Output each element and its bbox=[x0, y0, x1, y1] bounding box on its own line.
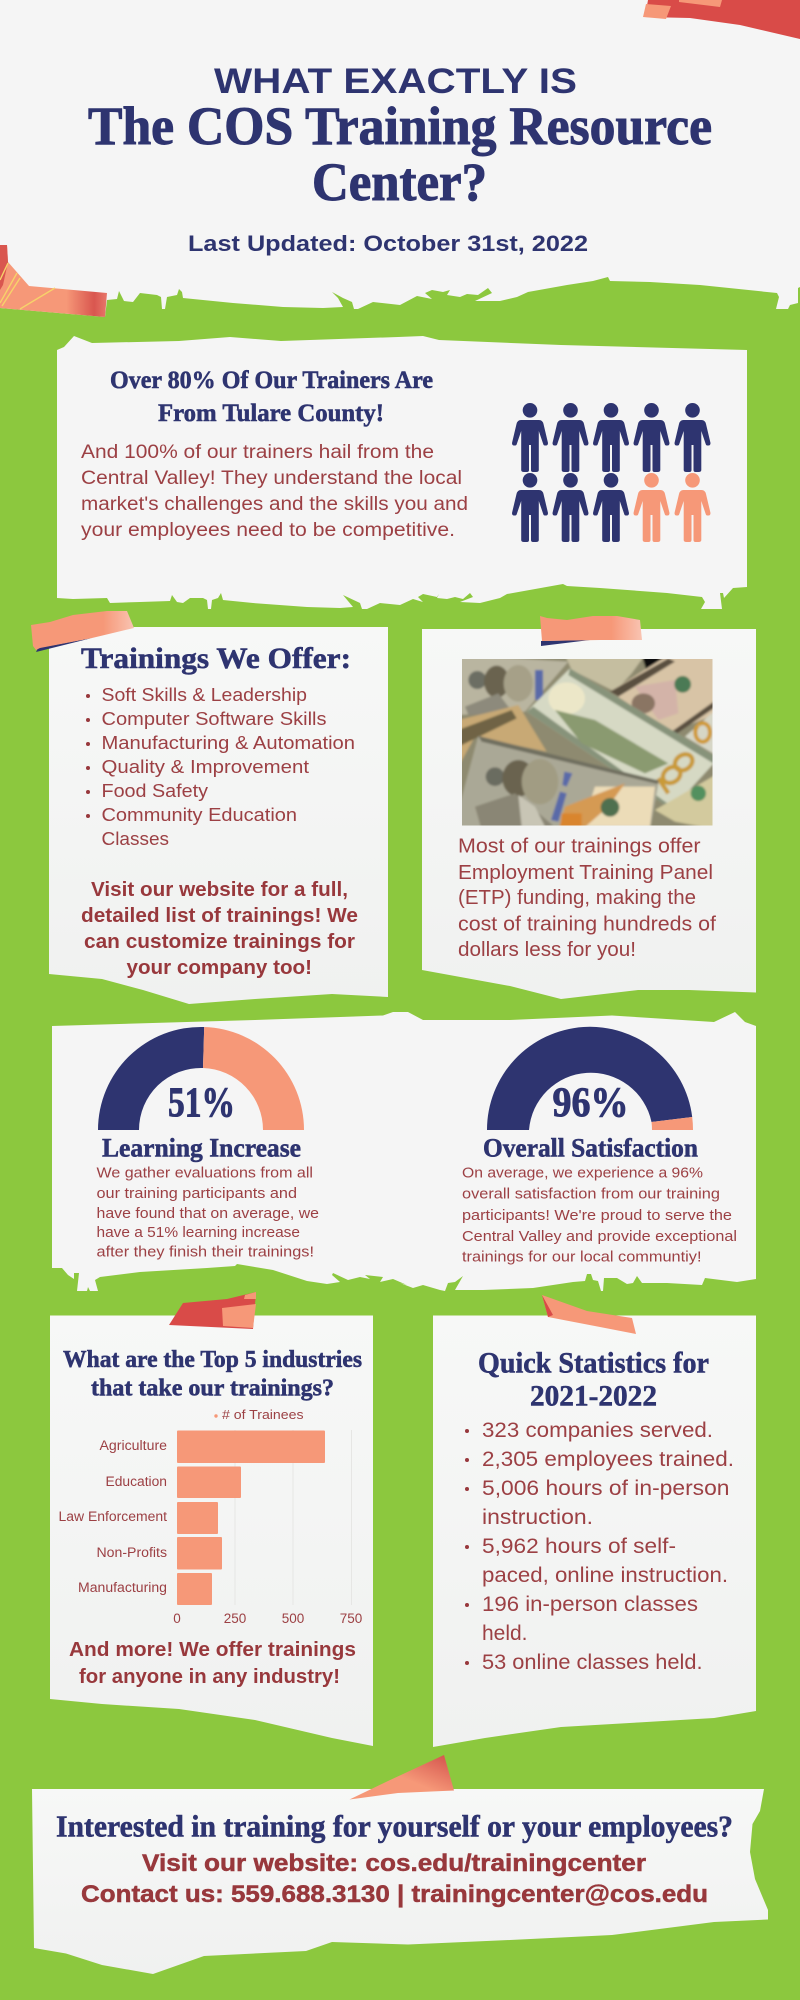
heading: trainings: Trainings We Offer: bbox=[81, 642, 351, 675]
bars bbox=[177, 1430, 325, 1605]
category labels: Manufacturing bbox=[78, 1580, 167, 1595]
heading: overall satisfaction: Overall Satisfaction bbox=[483, 1134, 699, 1162]
panel: header bbox=[0, 0, 800, 317]
callout: visit website: detailed list of trainings! We bbox=[81, 905, 358, 927]
heading: industries: What are the Top 5 industries bbox=[63, 1347, 362, 1373]
heading: learning increase: Learning Increase bbox=[102, 1134, 301, 1162]
text: learning body: We gather evaluations from all bbox=[96, 1165, 313, 1182]
heading: statistics: Quick Statistics for bbox=[478, 1346, 709, 1379]
list: statistics: 5,962 hours of self- bbox=[482, 1534, 676, 1558]
heading: trainers: Over 80% Of Our Trainers Are bbox=[110, 367, 433, 394]
list: statistics: 196 in-person classes bbox=[482, 1592, 698, 1616]
text: learning body: after they finish their trainings! bbox=[96, 1244, 314, 1261]
text: satisfaction body: participants! We're proud to serve the bbox=[462, 1207, 732, 1224]
category labels: Education bbox=[106, 1474, 167, 1489]
list: trainings bbox=[86, 684, 355, 849]
text: funding body: (ETP) funding, making the bbox=[458, 887, 696, 909]
tape: top right bbox=[643, 0, 800, 39]
panel: ETP funding bbox=[422, 616, 756, 999]
panel: top 5 industries bbox=[50, 1292, 373, 1746]
stat: 51%: 51% bbox=[168, 1080, 235, 1126]
text: trainers body bbox=[81, 442, 468, 541]
date line: Last Updated: October 31st, 2022 bbox=[188, 231, 588, 256]
bar chart: trainees by industry bbox=[58, 1407, 362, 1626]
panel: evaluation gauges bbox=[52, 1012, 756, 1291]
list: statistics: 5,006 hours of in-person bbox=[482, 1476, 730, 1500]
text: satisfaction body: overall satisfaction from our training bbox=[462, 1186, 720, 1203]
heading: industries bbox=[63, 1347, 362, 1402]
title: Center? bbox=[312, 152, 487, 212]
text: trainers body: your employees need to be competitive. bbox=[81, 520, 455, 541]
text: website: Visit our website: cos.edu/trainingcenter bbox=[142, 1850, 646, 1877]
text: funding body: cost of training hundreds of bbox=[458, 914, 716, 936]
chart: 96% gauge bbox=[487, 1027, 693, 1130]
heading: statistics bbox=[478, 1346, 709, 1412]
list: trainings: Quality & Improvement bbox=[102, 756, 309, 777]
text: learning body: our training participants and bbox=[96, 1185, 297, 1202]
tape: trainings bbox=[31, 611, 134, 652]
tape: funding bbox=[540, 616, 642, 646]
text: funding body: Most of our trainings offer bbox=[458, 836, 701, 858]
callout: more industries: for anyone in any industry! bbox=[79, 1666, 340, 1688]
axis ticks: 500 bbox=[282, 1611, 304, 1626]
callout: more industries: And more! We offer trainings bbox=[69, 1639, 356, 1661]
heading: trainers bbox=[110, 367, 433, 427]
text: funding body: dollars less for you! bbox=[458, 939, 636, 961]
callout: visit website: your company too! bbox=[126, 957, 312, 979]
heading: industries: that take our trainings? bbox=[91, 1376, 334, 1402]
list: statistics: held. bbox=[482, 1621, 528, 1645]
title: The COS Training Resource bbox=[88, 96, 712, 156]
axis ticks bbox=[173, 1611, 362, 1626]
category labels bbox=[58, 1438, 167, 1595]
heading: contact: Interested in training for yourself or your employees? bbox=[56, 1809, 733, 1844]
panel: trainings offered bbox=[31, 611, 388, 1004]
axis ticks: 250 bbox=[224, 1611, 246, 1626]
text: trainers body: And 100% of our trainers hail from the bbox=[81, 442, 434, 463]
axis ticks: 0 bbox=[173, 1611, 181, 1626]
heading: trainers: From Tulare County! bbox=[158, 400, 384, 427]
stat: 96%: 96% bbox=[552, 1080, 628, 1126]
list: statistics bbox=[465, 1418, 734, 1674]
title: WHAT EXACTLY IS bbox=[214, 62, 577, 101]
list: trainings: Soft Skills & Leadership bbox=[102, 684, 307, 705]
list: statistics: 53 online classes held. bbox=[482, 1650, 702, 1674]
callout: visit website bbox=[81, 879, 358, 979]
tape: industries bbox=[169, 1292, 256, 1329]
text: contact details: Contact us: 559.688.3130 | trainingcenter@cos.edu bbox=[81, 1881, 708, 1908]
tape: left bbox=[0, 245, 107, 317]
panel: trainers bbox=[57, 336, 747, 609]
axis ticks: 750 bbox=[340, 1611, 362, 1626]
text: satisfaction body bbox=[462, 1165, 737, 1266]
category labels: Non-Profits bbox=[96, 1545, 167, 1560]
text: satisfaction body: On average, we experience a 96% bbox=[462, 1165, 703, 1182]
list: statistics: 323 companies served. bbox=[482, 1418, 713, 1442]
category labels: Agriculture bbox=[100, 1438, 167, 1453]
list: trainings: Community Education bbox=[102, 804, 297, 825]
title bbox=[88, 62, 712, 212]
heading: statistics: 2021-2022 bbox=[530, 1380, 657, 1412]
callout: visit website: Visit our website for a full, bbox=[91, 879, 348, 901]
text: trainers body: Central Valley! They understand the local bbox=[81, 468, 462, 489]
legend: # of Trainees bbox=[222, 1407, 304, 1422]
list: statistics: paced, online instruction. bbox=[482, 1563, 728, 1587]
photo: dollar bills bbox=[458, 655, 718, 830]
text: learning body: have found that on average, we bbox=[96, 1205, 319, 1222]
list: statistics: 2,305 employees trained. bbox=[482, 1447, 734, 1471]
text: funding body bbox=[458, 836, 716, 961]
list: trainings: Food Safety bbox=[102, 780, 209, 801]
category labels: Law Enforcement bbox=[58, 1509, 167, 1524]
text: satisfaction body: Central Valley and provide exceptional bbox=[462, 1228, 737, 1245]
list: trainings: Manufacturing & Automation bbox=[102, 732, 355, 753]
panel: quick statistics bbox=[433, 1295, 756, 1747]
list: trainings: Classes bbox=[102, 828, 169, 849]
chart: 51% gauge bbox=[98, 1027, 304, 1130]
text: trainers body: market's challenges and the skills you and bbox=[81, 494, 468, 515]
text: learning body: have a 51% learning increase bbox=[96, 1224, 300, 1241]
text: funding body: Employment Training Panel bbox=[458, 862, 713, 884]
list: trainings: Computer Software Skills bbox=[102, 708, 326, 729]
tape: statistics bbox=[542, 1295, 636, 1334]
panel: contact bbox=[32, 1755, 768, 1974]
icon: people pictogram bbox=[512, 403, 710, 542]
callout: more industries bbox=[69, 1639, 356, 1688]
list: statistics: instruction. bbox=[482, 1505, 593, 1529]
text: learning body bbox=[96, 1165, 319, 1261]
callout: visit website: can customize trainings for bbox=[84, 931, 355, 953]
text: satisfaction body: trainings for our local communtiy! bbox=[462, 1249, 702, 1266]
tape: contact bbox=[350, 1755, 454, 1800]
